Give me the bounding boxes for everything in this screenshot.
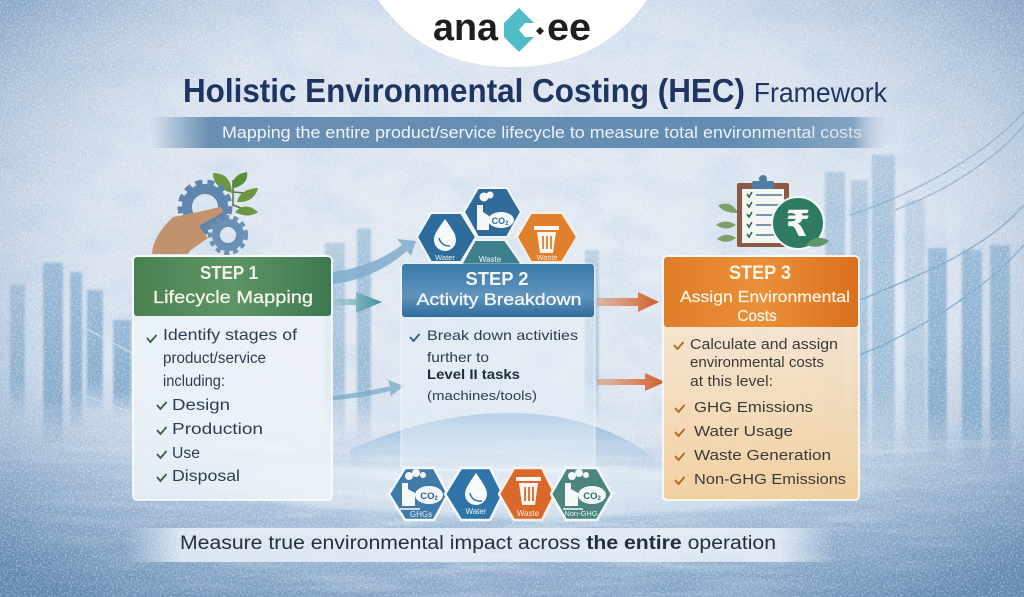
subtitle band: [150, 117, 890, 148]
arrow: step 1 curved up to hexagons: [332, 239, 416, 284]
hexagon: waste orange: [517, 213, 577, 262]
title: Holistic Environmental Costing (HEC) Framework: [183, 72, 888, 109]
arrow: step 1 to step 2: [334, 292, 382, 313]
step 3 checklist: [674, 337, 846, 488]
hexagon: non-GHG: 2: [597, 496, 601, 502]
hexagon: GHGs: CO: [420, 491, 434, 502]
hexagon: waste teal: Waste: [479, 255, 502, 264]
step 3 header: STEP 3: [729, 263, 791, 284]
step 2 header: [402, 264, 594, 317]
logo badge: ee: [547, 7, 591, 49]
hexagon: water: [445, 468, 503, 520]
hexagon: non-GHG: CO: [583, 491, 597, 502]
step 1 checklist: product/service: [163, 350, 266, 367]
step 2 header: Activity Breakdown: [416, 291, 582, 309]
step 3 header: Assign Environmental: [680, 289, 850, 306]
hexagon: non-GHG: [551, 468, 612, 520]
step 2 text: Level II tasks: [427, 366, 520, 382]
hexagon: GHGs: [389, 468, 448, 520]
step 3 checklist: Water Usage: [694, 424, 793, 440]
step 2 text: further to: [427, 349, 489, 365]
step 3 checklist: Non-GHG Emissions: [694, 472, 846, 488]
icon row: step 2 top hexagons: [417, 188, 577, 290]
arrow: step 1 lower to step 2: [333, 380, 404, 400]
step 3 checklist: Waste Generation: [694, 448, 831, 464]
hexagon: water: Water: [465, 507, 487, 516]
step 2 text: [410, 327, 578, 403]
step 1 checklist: Design: [172, 397, 230, 414]
icon row: step 2 bottom hexagons: [389, 468, 612, 520]
step 2 header: STEP 2: [466, 269, 528, 289]
icon: clipboard with rupee coin and leaves: ₹: [785, 204, 811, 245]
logo badge: [378, 0, 647, 67]
hexagon: waste: Waste: [517, 509, 540, 518]
panel: step 2: [401, 264, 595, 470]
arrow: step 2 to step 3 lower: [597, 373, 665, 391]
step 1 checklist: including:: [163, 373, 225, 390]
step 1 header: Lifecycle Mapping: [153, 287, 313, 307]
hexagon: waste teal: [462, 240, 521, 290]
hexagon: CO2: [464, 188, 521, 237]
footer message band: [125, 528, 835, 562]
hexagon: waste orange: Waste: [537, 253, 557, 262]
panel: step 3: [663, 256, 859, 500]
icon: hand holding gears with leaves: [152, 172, 258, 254]
step 2 text: Break down activities: [427, 327, 578, 343]
step 2 text: (machines/tools): [427, 388, 537, 403]
step 1 checklist: Use: [172, 445, 200, 462]
hexagon: GHGs: 2: [434, 496, 438, 502]
panel: step 1: [133, 256, 332, 500]
icon: clipboard with rupee coin and leaves: [716, 175, 829, 249]
step 1 header: [134, 257, 331, 316]
step 3 checklist: at this level:: [690, 374, 773, 390]
step 1 checklist: Identify stages of: [163, 327, 298, 344]
hexagon: waste: [499, 468, 555, 520]
step 3 header: Costs: [737, 308, 777, 325]
step 3 header: [664, 257, 858, 327]
hexagon: CO2: CO: [492, 216, 505, 226]
step 3 checklist: environmental costs: [690, 355, 824, 371]
hexagon: GHGs: GHGs: [410, 510, 432, 519]
step 1 checklist: [147, 327, 298, 485]
hexagon: non-GHG: Non-GHG: [564, 509, 598, 518]
step 1 checklist: Disposal: [172, 468, 240, 485]
hexagon: CO2: 2: [505, 221, 509, 227]
step 3 checklist: GHG Emissions: [694, 400, 813, 416]
subtitle band: Mapping the entire product/service lifecycle to measure total environmental costs: [222, 123, 862, 142]
step 3 checklist: Calculate and assign: [690, 337, 838, 353]
hexagon: water: [417, 213, 476, 262]
step 1 header: STEP 1: [200, 263, 258, 283]
step 1 checklist: Production: [172, 421, 263, 438]
hexagon: water: Water: [435, 253, 455, 262]
logo badge: ana: [433, 7, 499, 49]
arrow: step 2 to step 3 upper: [597, 292, 659, 312]
footer message band: Measure true environmental impact across the entire operation: [180, 533, 776, 554]
